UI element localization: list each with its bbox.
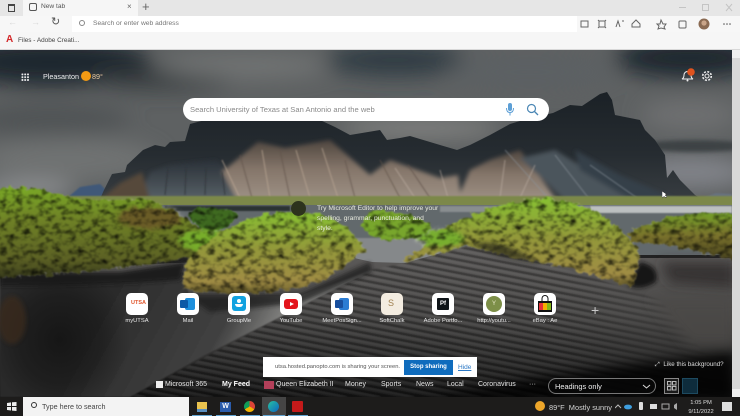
taskbar: file explorer [197,402,207,412]
window controls [679,4,732,12]
label: youtube link: http://youtu... [477,318,511,324]
windows taskbar [0,397,740,416]
nav: My Feed: My Feed [222,381,250,388]
weather sun [535,401,545,411]
notification bell [682,68,695,82]
notification center [722,402,732,411]
Adobe favicon: A [6,34,13,45]
centre mound [182,212,366,294]
taskbar app underlines [192,415,308,416]
tile: MeetPosSign [331,293,353,315]
tile: YouTube [280,293,302,315]
address toolbar [0,16,740,32]
stop sharing button: Stop sharing [410,364,447,370]
tile: Mail [177,293,199,315]
clock [688,400,714,414]
temperature: 89° [92,72,103,81]
nav: Local: Local [447,381,464,388]
favorite label: Files - Adobe Creati... [18,37,79,44]
like background link: ⤢ Like this background? [655,361,724,368]
search box [183,98,549,121]
taskbar: word: W [222,403,229,410]
active tab [23,0,138,16]
label: eBay: eBay : Ae [533,318,557,324]
tab actions icon [8,4,15,12]
rock streaks [165,148,640,200]
editor tip icon [291,201,306,216]
settings gear [702,70,712,82]
shadow under right mound [470,243,540,263]
grass mounds [0,188,734,294]
bright joint between left and centre mounds [179,229,231,251]
search glyph [79,20,85,26]
search placeholder: Search University of Texas at San Antonio and the web [190,105,375,114]
label: SoftChalk: SoftChalk [379,318,405,324]
far right mound [628,212,734,260]
location label: Pleasanton [43,72,79,81]
nav: News: News [416,381,434,388]
label: MeetPosSign: MeetPosSign... [322,318,362,324]
screen sharing bar [263,357,477,377]
nav: flag [264,381,274,389]
tile: myUTSA [126,293,148,315]
dropdown chevron [642,384,650,389]
nav: Money: Money [345,381,366,388]
label: YouTube: YouTube [280,318,302,324]
tile: youtube link [483,293,505,315]
clock: 1:05 PM [690,400,712,406]
tile: SoftChalk [381,293,403,315]
tab close: × [127,2,132,11]
add shortcut plus: + [591,302,599,318]
address placeholder: Search or enter web address [93,20,179,27]
editor tip text: Try Microsoft Editor to help improve your [317,205,438,212]
brown top patch on left mound [118,207,182,229]
headings dropdown [548,378,656,394]
tile: youtube link: Y [492,301,496,307]
nav: Coronavirus: Coronavirus [478,381,516,388]
weather text: 89°F Mostly sunny [549,402,612,412]
address field [72,16,577,32]
search circle [31,402,37,408]
apps launcher [21,73,29,81]
editor tip text: spelling, grammar, punctuation, and [317,215,424,222]
magnifier icon [526,104,538,116]
Microsoft 365 logo [156,381,163,388]
sharing message: utsa.hosted.panopto.com is sharing your screen. [275,364,400,370]
tile: Adobe Portfolio: Pf [440,301,446,307]
tray icons [615,402,677,410]
taskbar: active edge [262,397,286,416]
list layout button [682,378,698,394]
green left flank of right mound [416,229,464,247]
mouse cursor [662,191,667,198]
clock: 9/11/2022 [688,408,714,414]
favorites bar [0,32,740,50]
right mound [402,198,640,288]
page scrollbar [732,50,740,397]
mountain range [100,92,708,206]
tab title: New tab [41,3,65,10]
editor tip text: style. [317,225,333,232]
tile: myUTSA: UTSA [131,300,146,306]
black sand dunes with ripples [0,246,732,397]
taskbar: word [220,402,231,412]
start button [7,402,16,411]
reload icon: ↻ [51,16,60,28]
editor tip text [317,205,438,232]
sky [0,38,740,210]
left mound [0,188,222,278]
nav: more: ··· [529,381,536,388]
tile: GroupMe [228,293,250,315]
grid layout button [664,378,679,394]
label: Mail: Mail [183,318,193,324]
label: GroupMe: GroupMe [227,318,251,324]
distant right ridge [700,193,732,203]
dropdown value: Headings only [555,382,602,391]
far small mound [186,207,238,232]
stop sharing button [404,360,453,375]
tile: SoftChalk: S [388,298,394,308]
nav: Queen Elizabeth II: Queen Elizabeth II [276,381,334,388]
taskbar search text: Type here to search [42,402,106,411]
horizon meadow and water [0,196,740,268]
distant blue ridge [66,184,118,199]
taskbar search box [23,397,189,416]
mid-back mound [360,210,432,240]
tile: eBay [534,293,556,315]
nav: Sports: Sports [381,381,401,388]
label: Adobe Portfolio: Adobe Portfo... [424,318,462,324]
tile: Adobe Portfolio [432,293,454,315]
tab favicon [29,3,37,11]
toolbar icons [580,18,731,30]
weather sun icon [81,71,91,81]
hide link: Hide [458,364,471,371]
taskbar: acrobat [292,401,303,412]
label: myUTSA: myUTSA [125,318,149,324]
nav: Microsoft 365: Microsoft 365 [165,381,207,388]
taskbar: chrome [244,401,255,412]
microphone icon [506,103,514,116]
tab strip [0,0,740,16]
back and forward arrows: ←→ [8,17,54,27]
